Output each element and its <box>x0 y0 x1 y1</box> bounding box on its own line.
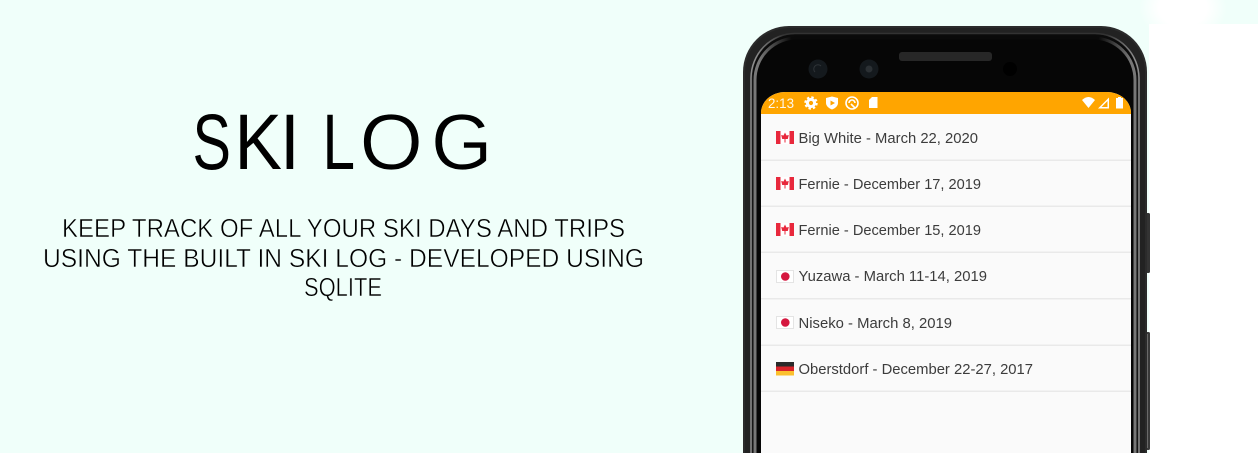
flag: Japan <box>776 270 794 282</box>
description text: KEEP TRACK OF ALL YOUR SKI DAYS AND TRIPS <box>62 213 625 243</box>
row label: Fernie - December 17, 2019 <box>798 176 981 193</box>
description text: SQLITE <box>304 272 382 302</box>
list row: Niseko <box>776 315 952 332</box>
list row: Big White <box>776 130 978 147</box>
camera lens left <box>808 60 828 78</box>
title: G <box>431 97 492 186</box>
title: L <box>322 97 355 186</box>
description text: USING THE BUILT IN SKI LOG - DEVELOPED USING <box>43 243 644 273</box>
icon: sd card <box>869 97 878 108</box>
title: I <box>280 98 300 186</box>
row label: Fernie - December 15, 2019 <box>798 222 981 239</box>
speaker grille <box>899 52 992 61</box>
icon: wifi <box>1082 97 1095 108</box>
description text <box>43 213 644 302</box>
row label: Oberstdorf - December 22-27, 2017 <box>798 361 1033 378</box>
flag: Japan <box>776 316 794 328</box>
row label: Big White - March 22, 2020 <box>798 130 978 147</box>
phone screen <box>761 92 1131 453</box>
flag: Canada <box>776 223 794 236</box>
status time: 2:13 <box>768 95 794 111</box>
list row: Fernie December 17 <box>776 176 981 193</box>
flag: Canada <box>776 177 794 190</box>
front sensor <box>1003 62 1017 76</box>
status bar <box>761 92 1131 114</box>
icon: cell signal <box>1098 98 1109 108</box>
camera lens right <box>860 60 878 78</box>
list row: Fernie December 15 <box>776 222 981 239</box>
title: O <box>360 97 423 186</box>
title <box>192 97 492 186</box>
icon: shield play <box>826 96 838 110</box>
title: S <box>192 97 231 186</box>
title: K <box>234 98 282 186</box>
phone side buttons <box>1146 213 1150 450</box>
row label: Niseko - March 8, 2019 <box>798 315 952 332</box>
icon: settings gear <box>805 97 817 109</box>
icon: battery <box>1116 97 1123 108</box>
ski log list <box>761 130 1131 392</box>
phone mockup <box>743 26 1150 453</box>
phone frame <box>743 26 1147 453</box>
list row: Oberstdorf <box>776 361 1033 378</box>
row label: Yuzawa - March 11-14, 2019 <box>798 268 987 285</box>
flag: Canada <box>776 131 794 144</box>
list row: Yuzawa <box>776 268 987 285</box>
icon: circular sync <box>846 97 858 109</box>
flag: Germany <box>776 362 794 376</box>
